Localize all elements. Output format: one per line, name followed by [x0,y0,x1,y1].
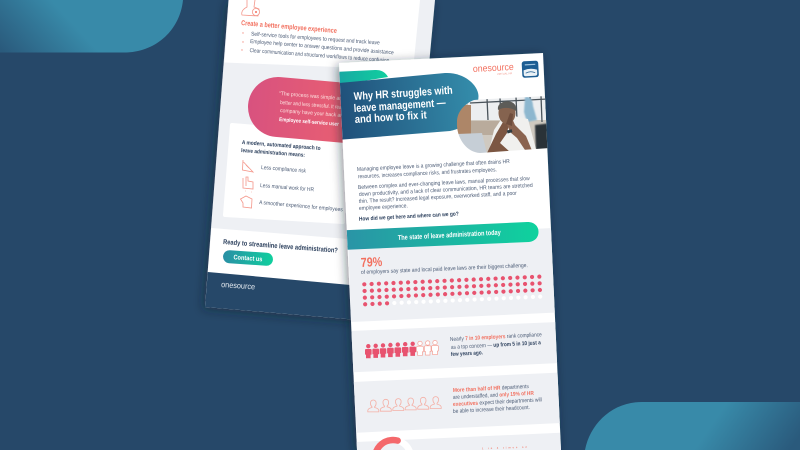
back page [205,0,435,324]
icon: foot with heart [242,0,260,16]
decorative teal corner top left [0,0,183,52]
front page [339,53,561,450]
donut chart [373,437,413,450]
intro question: How did we get here and where can we go? [359,211,459,223]
people chart: outlined busts [368,397,441,412]
panel: employee experience [224,0,420,70]
title: Why HR struggles with [353,85,453,103]
icon: workload [243,177,253,192]
panel: footer [205,272,406,324]
stat caption: of employers say state and local paid leave laws are their biggest challenge. [361,263,528,276]
benefits heading: leave administration means: [241,148,305,159]
title: and how to fix it [354,109,427,126]
intro text: Between complex and ever-changing leave laws, manual processes that slow [358,176,531,191]
bullet list: Self-service tools for employees to request and track leave [251,32,380,46]
people chart: 7 in 10 [365,340,438,358]
compliance text: few years ago. [451,350,483,358]
panel: time statistic [356,433,561,450]
intro text: employee experience. [359,203,408,212]
section banner [340,222,538,250]
benefits heading: A modern, automated approach to [242,140,321,152]
panel: pink quote: Employee self-service user [279,117,340,128]
panel: staffing statistic [353,372,561,433]
benefit text: Less manual work for HR [260,183,314,193]
bullet list: Clear communication and structured workflows to reduce confusion [249,48,389,64]
panel: pink quote: better and less stressful. It really [280,100,346,111]
panel: benefits card [225,125,345,222]
panel: pink quote: “The process was simple and [279,91,345,102]
staffing text: are understaffed, and only 19% of HR [453,391,534,401]
title [354,86,452,123]
dot chart: 79 of 100 [364,277,541,304]
button [223,250,273,266]
photo [456,96,548,153]
footer logo: onesource [221,280,256,291]
intro text: resources, increases compliance risks, and frustrates employees. [358,167,497,180]
logo: VIRTUAL HR [497,71,512,76]
compliance text [450,332,542,358]
panel: pink quote: company have your back and [280,108,346,119]
panel: pink quote [245,74,410,148]
section banner: The state of leave administration today [398,230,501,242]
icon: compliance [242,160,253,172]
stat value: 79% [360,254,383,270]
panel: statistic 79 percent [340,222,557,322]
decorative teal corner bottom right [585,402,800,450]
staffing text [453,384,542,415]
logo: onesource [473,62,514,75]
compliance text: as a top concern — up from 5 in 10 just a [451,340,542,351]
staffing text: More than half of HR departments [453,384,529,394]
staffing text: executives expect their departments will [453,397,542,408]
header pill [339,73,478,140]
intro text: thin. The result? Increased legal exposure, overworked staff, and a poor [359,191,517,205]
benefits heading [241,140,321,159]
panel: call to action [208,228,410,290]
panel: compliance statistic [351,322,561,372]
staffing text: be able to increase their headcount. [453,405,530,415]
badge [522,61,539,78]
bullet list: Employee help center to answer questions and provide assistance [250,39,394,56]
bullet list [241,32,394,64]
benefit text: Less compliance risk [261,165,306,175]
compliance text: Nearly 7 in 10 employers rank compliance [450,332,542,343]
benefit text [259,165,343,213]
button: Contact us [233,254,263,263]
intro text: Managing employee leave is a growing challenge that often drains HR [357,159,510,173]
icon: experience [240,196,252,208]
accent tab [339,70,388,85]
title: leave management — [353,97,446,115]
cta heading: Ready to streamline leave administration? [223,239,338,255]
intro text [357,159,533,212]
heading: Create a better employee experience [241,20,337,35]
intro text: down productivity, and a lack of clear communication, HR teams are stretched [359,183,533,198]
benefit text: A smoother experience for employees [259,200,343,213]
